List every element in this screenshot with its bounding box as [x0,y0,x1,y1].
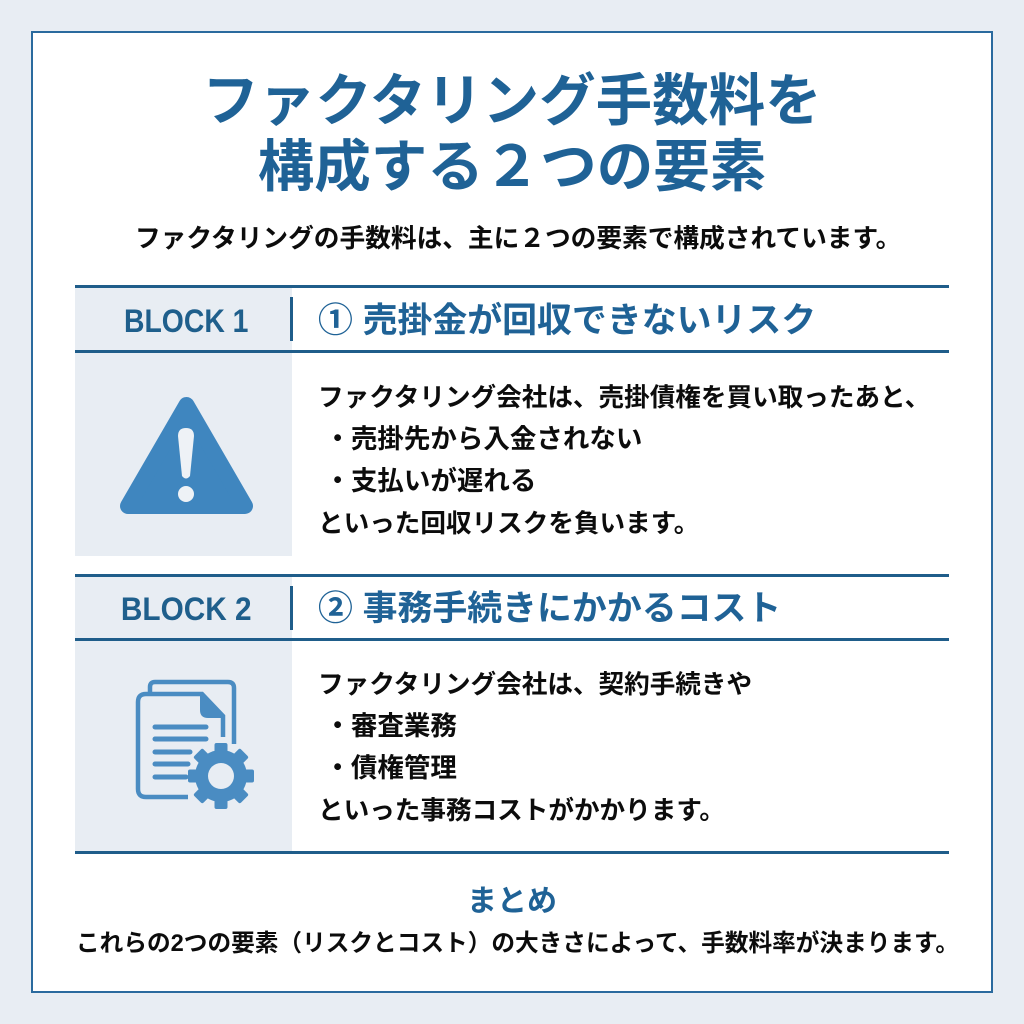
summary text: これらの2つの要素（リスクとコスト）の大きさによって、手数料率が決まります。 [76,931,959,957]
block 1 icon panel [75,353,292,556]
block 1 heading: ① 売掛金が回収できないリスク [318,301,816,340]
icon: document with gear [136,680,254,809]
title: ファクタリング手数料を [202,69,822,132]
block 1 label: BLOCK 1 [124,303,249,339]
block 1 text: ファクタリング会社は、売掛債権を買い取ったあと、 [318,384,930,412]
block 2 heading: ② 事務手続きにかかるコスト [318,589,781,628]
title: 構成する２つの要素 [258,135,766,198]
block 2 icon panel [75,641,292,851]
summary heading: まとめ [467,885,557,918]
block 1 text: ・支払いが遅れる [324,466,536,496]
block 2 label: BLOCK 2 [121,591,252,627]
block 2 header [75,577,781,638]
block 2 text: ファクタリング会社は、契約手続きや [318,671,752,699]
block 2 label [75,577,292,639]
subtitle: ファクタリングの手数料は、主に２つの要素で構成されています。 [135,225,901,253]
block 2 text: といった事務コストがかかります。 [318,797,725,825]
block 1 header [75,288,816,350]
block 2 text: ・債権管理 [324,753,457,783]
block 2 text [318,670,752,825]
icon: warning triangle [120,397,253,514]
block 2 text: ・審査業務 [324,711,457,741]
title [202,69,822,198]
block 1 text [318,384,930,538]
block 1 label [75,288,292,350]
block 1 text: といった回収リスクを負います。 [318,510,699,538]
block 1 text: ・売掛先から入金されない [324,424,642,454]
